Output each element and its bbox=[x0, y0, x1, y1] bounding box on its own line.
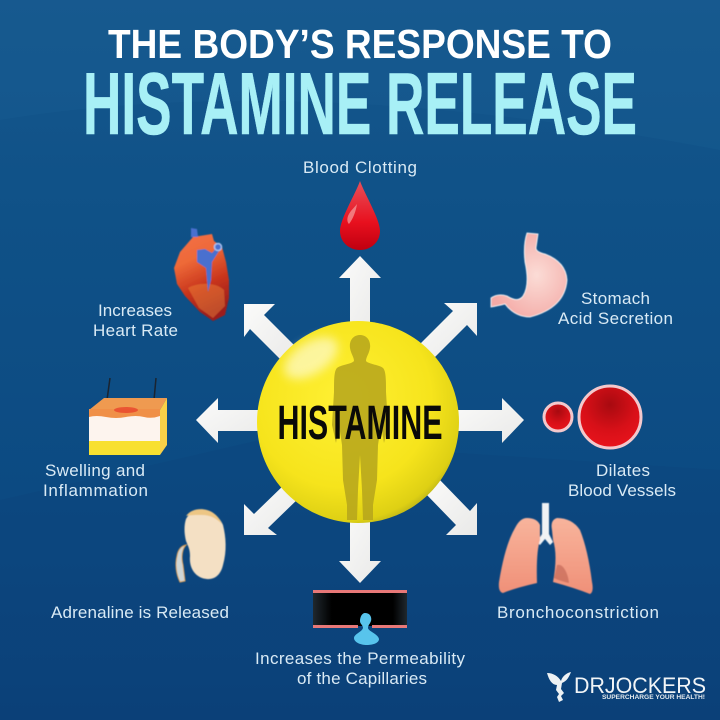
histamine sphere bbox=[257, 321, 459, 523]
label: dilates blood vessels: Blood Vessels bbox=[568, 481, 676, 500]
label: bronchoconstriction: Bronchoconstriction bbox=[497, 603, 659, 622]
logo: Dr Jockers bbox=[547, 672, 706, 702]
arrows radiating from histamine bbox=[196, 256, 524, 583]
label: dilates blood vessels: Dilates bbox=[596, 461, 650, 480]
arrow: right bbox=[450, 398, 524, 443]
label: stomach acid secretion bbox=[558, 289, 673, 328]
icon: skin layers bbox=[89, 378, 167, 455]
label: swelling and inflammation: Inflammation bbox=[43, 481, 148, 500]
arrow: upper right bbox=[420, 303, 477, 358]
icon: leaf mark bbox=[547, 672, 571, 702]
logo: Dr Jockers: SUPERCHARGE YOUR HEALTH! bbox=[602, 695, 705, 701]
label: blood clotting: Blood Clotting bbox=[303, 158, 417, 177]
icon: heart bbox=[174, 228, 229, 321]
label: capillaries bbox=[255, 649, 466, 688]
label: capillaries: Increases the Permeability bbox=[255, 649, 466, 668]
label: heart rate: Heart Rate bbox=[93, 321, 178, 340]
label: capillaries: of the Capillaries bbox=[297, 669, 427, 688]
icon: blood drop bbox=[340, 181, 380, 250]
sphere highlight bbox=[277, 329, 345, 387]
arrow: lower left bbox=[244, 482, 301, 535]
arrow: down bbox=[339, 510, 381, 583]
arrow: upper left bbox=[244, 304, 297, 362]
label: heart rate: Increases bbox=[98, 301, 172, 320]
title: THE BODY’S RESPONSE TO bbox=[108, 21, 612, 67]
icon: human silhouette bbox=[332, 335, 388, 520]
sphere label: HISTAMINE bbox=[278, 397, 442, 450]
arrow: lower right bbox=[424, 478, 477, 535]
arrow: up bbox=[339, 256, 381, 335]
logo: Dr Jockers: DRJOCKERS bbox=[574, 673, 706, 698]
label: dilates blood vessels bbox=[568, 461, 676, 500]
icon: kidney bbox=[176, 509, 226, 582]
icon: capillary bbox=[313, 590, 407, 645]
label: heart rate bbox=[93, 301, 178, 340]
title bbox=[83, 21, 637, 153]
label: stomach acid secretion: Acid Secretion bbox=[558, 309, 673, 328]
arrow: left bbox=[196, 398, 270, 443]
label: swelling and inflammation bbox=[43, 461, 148, 500]
label: stomach acid secretion: Stomach bbox=[581, 289, 650, 308]
hair strokes bbox=[107, 378, 156, 400]
icon: lungs bbox=[499, 503, 593, 594]
label: adrenaline: Adrenaline is Released bbox=[51, 603, 229, 622]
icon: dilated blood vessels bbox=[544, 386, 641, 448]
label: swelling and inflammation: Swelling and bbox=[45, 461, 145, 480]
icon: stomach bbox=[491, 233, 567, 317]
